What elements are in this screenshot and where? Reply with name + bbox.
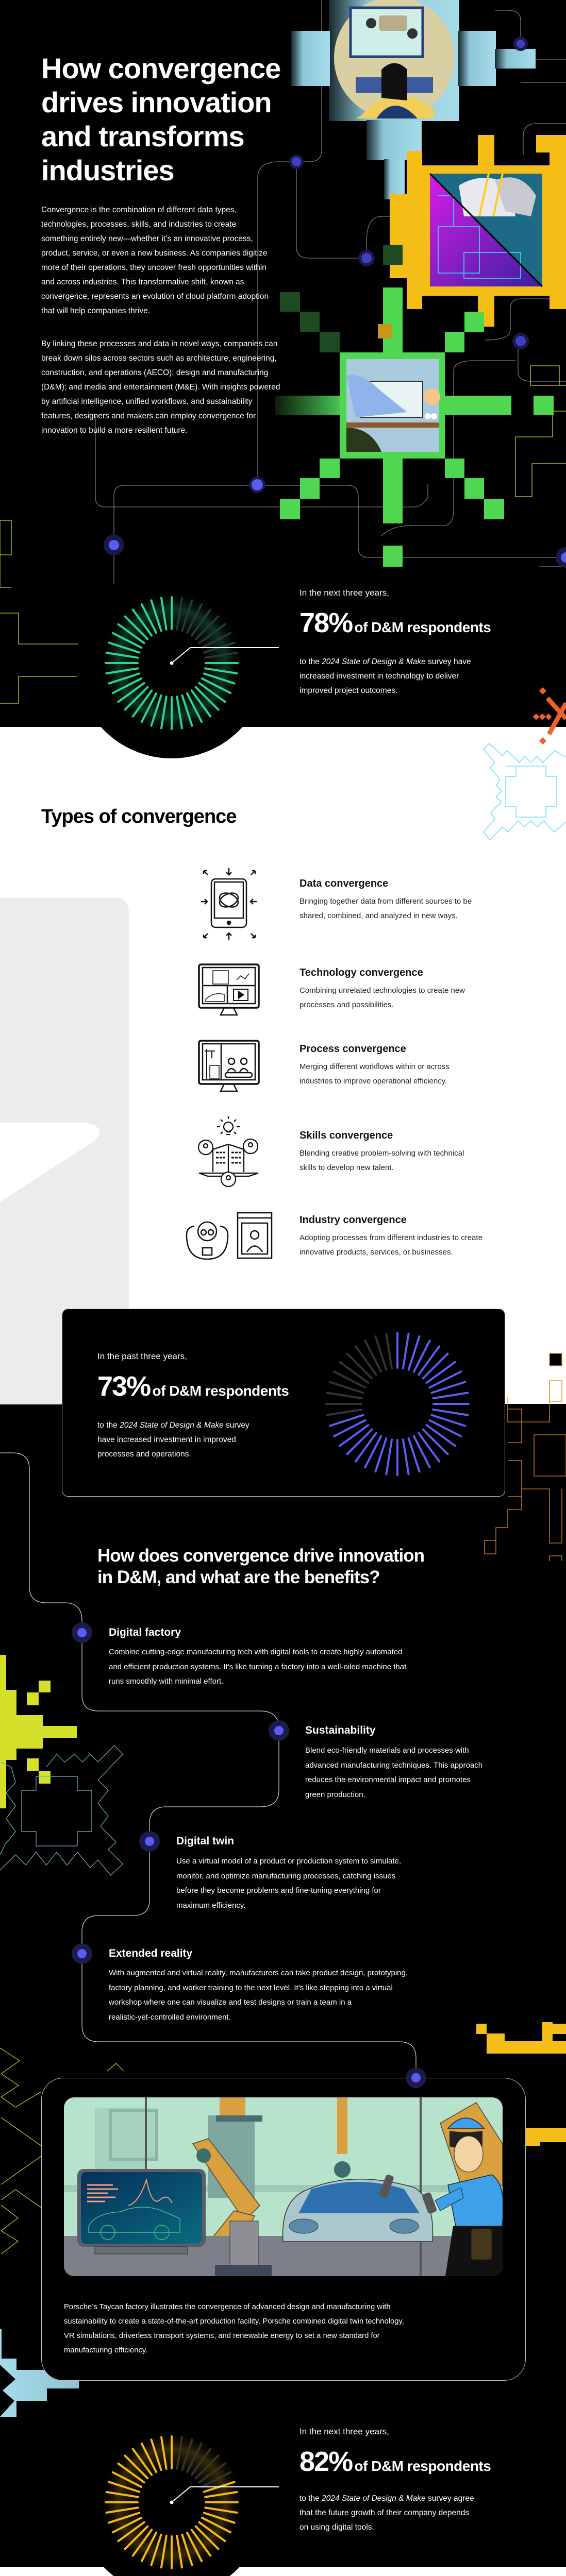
stat ring 82%	[104, 2435, 279, 2576]
text: industry convergence: Industry convergence	[299, 1214, 407, 1226]
text: process convergence: Merging different workflows within or across	[299, 1062, 450, 1071]
hero graphic: green pixel frame with designer illustration	[275, 245, 554, 567]
intro paragraph 2: innovation to build a more resilient future.	[41, 426, 187, 435]
case study card	[41, 2078, 526, 2381]
icon: technology convergence	[198, 963, 260, 1016]
hero background	[0, 0, 566, 727]
text: skills convergence: Blending creative problem-solving with technical	[299, 1149, 464, 1158]
text: data convergence: shared, combined, and analyzed in new ways.	[299, 911, 458, 920]
stat text 78%: increased investment in technology to deliver	[299, 672, 459, 681]
intro paragraph 2	[41, 340, 280, 435]
stat text 73%: processes and operations.	[97, 1450, 191, 1459]
hero graphic: yellow pixel frame with split illustration	[390, 135, 566, 327]
decoration: cyan outline pixel shape	[483, 743, 566, 840]
text: technology convergence: Combining unrelated technologies to create new	[299, 986, 465, 995]
intro paragraph 1: product, service, or even a new business. As companies digitize	[41, 249, 268, 258]
intro paragraph 1: that will help companies thrive.	[41, 307, 150, 315]
benefit: sustainability: green production.	[305, 1790, 365, 1799]
heading: how does convergence drive innovation: in D&M, and what are the benefits?	[97, 1567, 379, 1587]
benefit: digital twin: Digital twin	[176, 1835, 234, 1847]
benefit: extended reality: workshop where one can visualize and test designs or train a team in a	[109, 1998, 352, 2007]
card connector dot	[406, 2067, 426, 2088]
text: skills convergence	[299, 1130, 464, 1172]
decoration: light blue outline shape	[0, 1745, 123, 1876]
decoration: yellow pixel right	[476, 2022, 566, 2146]
stat text 78%: 78% of D&M respondents	[299, 607, 491, 638]
icon: skills convergence	[198, 1116, 259, 1187]
intro paragraph 1: technologies, processes, skills, and industries to create	[41, 220, 236, 229]
intro paragraph 2: by artificial intelligence, unified workflows, and sustainability	[41, 397, 252, 406]
intro paragraph 2: By linking these processes and data in novel ways, companies can	[41, 340, 277, 348]
timeline connector	[0, 1452, 417, 2068]
stat text 73%: to the 2024 State of Design & Make survey	[97, 1421, 249, 1430]
stat text 82%: In the next three years,	[299, 2427, 389, 2436]
icon: data convergence	[201, 868, 257, 940]
text: process convergence	[299, 1043, 450, 1086]
text: industry convergence: Adopting processes from different industries to create	[299, 1233, 482, 1242]
text: industry convergence	[299, 1214, 482, 1257]
text: technology convergence	[299, 967, 465, 1009]
title: How convergence drives innovation and transforms industries	[41, 52, 280, 187]
text: process convergence: industries to improve operational efficiency.	[299, 1077, 447, 1086]
case study caption: manufacturing efficiency.	[64, 2346, 147, 2354]
icon: industry convergence	[186, 1212, 272, 1260]
benefit: digital factory: Combine cutting-edge manufacturing tech with digital tools to create highly automated	[109, 1648, 402, 1656]
intro paragraph 2: break down silos across sectors such as architecture, engineering,	[41, 354, 277, 363]
decoration: lime pixel cluster	[0, 1655, 77, 1808]
intro paragraph 1: Convergence is the combination of different data types,	[41, 206, 237, 214]
benefit: extended reality: factory planning, and worker training to the next level. It’s like stepping into a virtual	[109, 1984, 393, 1992]
text: skills convergence: skills to develop new talent.	[299, 1163, 394, 1172]
stat text 78%: In the next three years,	[299, 588, 389, 598]
stat text 82%: to the 2024 State of Design & Make survey agree	[299, 2494, 474, 2503]
decoration: light blue block bottom-left	[0, 2329, 79, 2417]
text: data convergence: Bringing together data from different sources to be	[299, 897, 472, 906]
benefit: extended reality: Extended reality	[109, 1947, 192, 1959]
text: skills convergence: Skills convergence	[299, 1130, 393, 1141]
benefit: sustainability: reduces the environmental impact and promotes	[305, 1775, 471, 1784]
hero circuit lines	[0, 0, 566, 704]
benefit: sustainability: advanced manufacturing techniques. This approach	[305, 1761, 482, 1769]
stat text 78%: to the 2024 State of Design & Make survey have	[299, 657, 471, 666]
stat text 82%: 82% of D&M respondents	[299, 2446, 491, 2477]
benefit: digital twin: before they become problems and fine-tuning everything for	[176, 1886, 381, 1895]
benefit: extended reality	[109, 1947, 408, 2022]
decoration: orange pixel star	[533, 687, 566, 744]
stat ring 78%	[77, 596, 279, 758]
benefit: digital twin	[176, 1835, 401, 1909]
case study caption: Porsche’s Taycan factory illustrates the convergence of advanced design and manufacturing with	[64, 2303, 391, 2311]
benefit: digital factory: and efficient production systems. It’s like turning a factory into a well-oiled machine that	[109, 1662, 406, 1671]
stat text 78%: improved project outcomes.	[299, 686, 397, 695]
intro paragraph 2: construction, and operations (AECO); design and manufacturing	[41, 368, 268, 377]
stat text 78%	[299, 588, 491, 695]
benefit: digital factory: runs smoothly with minimal effort.	[109, 1677, 223, 1686]
case study caption: VR simulations, driverless transport systems, and renewable energy to set a new standard for	[64, 2332, 380, 2340]
case study caption	[64, 2303, 404, 2354]
intro paragraph 1: convergence, represents an evolution of cloud platform adoption	[41, 292, 269, 301]
benefit: digital twin: monitor, and optimize manufacturing processes, catching issues	[176, 1871, 395, 1880]
intro paragraph 1: more of their operations, they uncover fresh opportunities within	[41, 263, 267, 272]
stat text 73%: In the past three years,	[97, 1351, 187, 1361]
heading: how does convergence drive innovation: How does convergence drive innovation	[97, 1546, 424, 1566]
text: data convergence	[299, 878, 472, 920]
benefit: sustainability: Sustainability	[305, 1724, 376, 1736]
grey side panel	[0, 897, 129, 1404]
text: technology convergence: processes and possibilities.	[299, 1001, 394, 1009]
decoration: yellow zigzag left	[0, 2047, 124, 2255]
hero graphic: light blue pixel frame with oval illustration	[291, 0, 536, 199]
intro paragraph 2: features, designers and makers can employ convergence for	[41, 412, 256, 420]
stat text 73%: 73% of D&M respondents	[97, 1371, 289, 1402]
benefit: digital twin: maximum efficiency.	[176, 1901, 245, 1909]
benefit: extended reality: realistic-yet-controlled environment.	[109, 2012, 231, 2022]
stat box: 73%	[62, 1309, 505, 1497]
benefit: sustainability: Blend eco-friendly materials and processes with	[305, 1746, 469, 1755]
stat text 82%: on using digital tools.	[299, 2523, 374, 2532]
text: technology convergence: Technology convergence	[299, 967, 423, 978]
case study caption: sustainability to create a state-of-the-art production facility. Porsche combined digital twin technology,	[64, 2317, 404, 2326]
benefit: digital factory: Digital factory	[109, 1626, 181, 1638]
intro paragraph 1: and across industries. This transformative shift, known as	[41, 278, 244, 286]
heading: types of convergence: Types of convergence	[41, 806, 236, 827]
intro paragraph 1	[41, 206, 269, 315]
text: process convergence: Process convergence	[299, 1043, 406, 1055]
text: industry convergence: innovative products, services, or businesses.	[299, 1248, 453, 1257]
benefit: digital twin: Use a virtual model of a product or production system to simulate,	[176, 1857, 401, 1866]
stat text 82%: that the future growth of their company depends	[299, 2509, 469, 2517]
stat text 82%	[299, 2427, 491, 2532]
icon: process convergence	[198, 1040, 260, 1092]
benefit: digital factory	[109, 1626, 406, 1686]
stat ring 73%	[325, 1332, 470, 1476]
benefit: extended reality: With augmented and virtual reality, manufacturers can take product design, prototyping,	[109, 1969, 408, 1977]
text: data convergence: Data convergence	[299, 878, 388, 889]
stat text 73%: have increased investment in improved	[97, 1435, 236, 1444]
intro paragraph 2: (D&M); and media and entertainment (M&E). With insights powered	[41, 383, 280, 392]
hero circuit dots	[104, 37, 566, 568]
factory illustration	[64, 2097, 503, 2276]
section 3 background	[0, 1404, 566, 2567]
intro paragraph 1: something entirely new—whether it’s an innovative process,	[41, 234, 253, 243]
benefit: sustainability	[305, 1724, 482, 1799]
stat text 73%	[97, 1351, 289, 1459]
decoration: orange outline pixels	[484, 1353, 566, 1561]
heading: how does convergence drive innovation	[97, 1546, 424, 1587]
